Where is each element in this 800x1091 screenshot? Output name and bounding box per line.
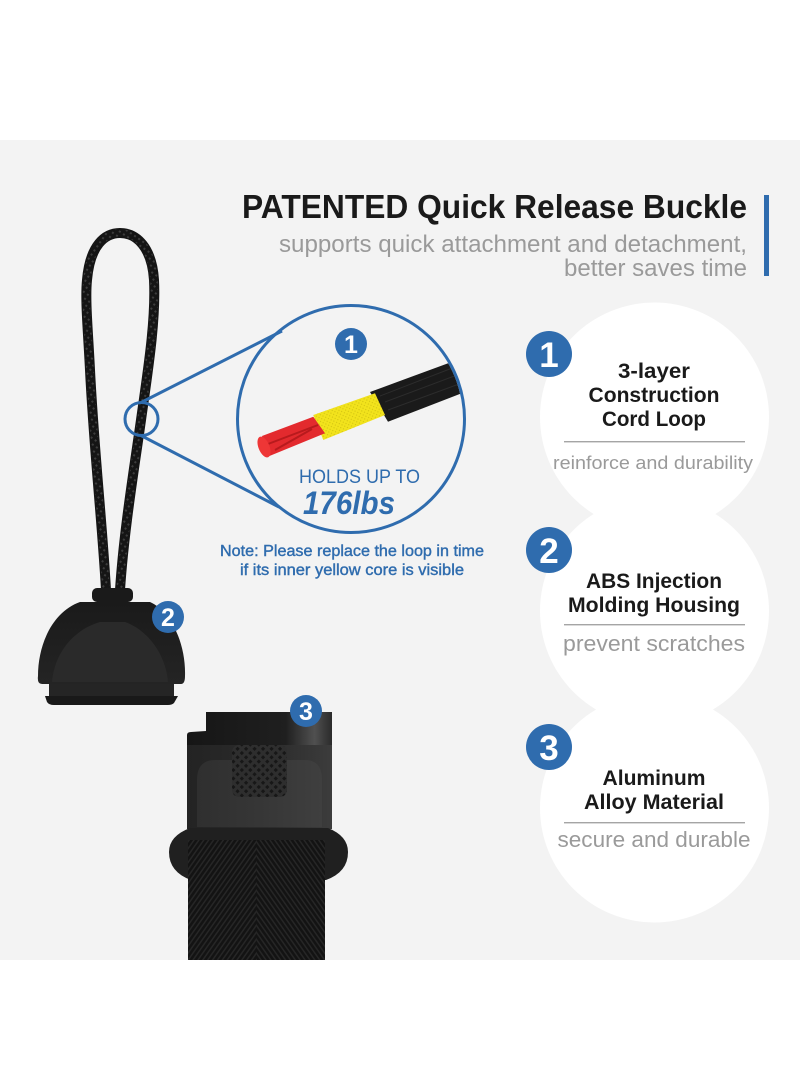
- feature 1 text: reinforce and durability: [553, 452, 754, 473]
- strap and ring: [169, 828, 348, 960]
- load value: 176lbs: [303, 485, 395, 521]
- subtitle: better saves time: [564, 255, 747, 282]
- badge 3: 3: [539, 729, 559, 768]
- badge 2: [526, 527, 572, 573]
- accent bar: [764, 195, 769, 276]
- note: [220, 543, 484, 579]
- feature 1 text: Cord Loop: [602, 408, 706, 431]
- badge on buckle: [290, 695, 322, 727]
- feature 1 text: 3-layer: [618, 360, 690, 383]
- cable cross-section: [257, 363, 460, 458]
- feature 1 background: [540, 302, 769, 532]
- small lens ring: [125, 402, 158, 436]
- buckle: [187, 712, 332, 829]
- feature 3 text: Alloy Material: [584, 791, 724, 814]
- badge on housing: 2: [161, 604, 175, 632]
- feature 2 text: prevent scratches: [563, 631, 745, 656]
- badge 1: 1: [539, 336, 559, 375]
- magnifier callout: [125, 306, 478, 532]
- feature 3 background: [540, 694, 769, 922]
- heading: [242, 188, 769, 282]
- subtitle: supports quick attachment and detachment,: [279, 231, 747, 258]
- feature 2 text: ABS Injection: [586, 570, 722, 593]
- lens badge: 1: [344, 331, 358, 359]
- zoom lines: [140, 331, 282, 507]
- panel: feature circles: [540, 302, 769, 922]
- cord loop: [86, 233, 154, 590]
- badge 2: 2: [539, 532, 559, 571]
- title: PATENTED Quick Release Buckle: [242, 188, 747, 225]
- holds up to label: HOLDS UP TO: [299, 467, 420, 488]
- feature 2 text: [563, 570, 745, 656]
- badge 3: [526, 724, 572, 770]
- badge on housing: [152, 601, 184, 633]
- feature 3 text: Aluminum: [602, 767, 706, 790]
- large lens ring: [238, 306, 464, 532]
- lens badge: [335, 328, 367, 360]
- housing: [38, 588, 185, 705]
- feature 3 text: [558, 767, 750, 852]
- subtitle: [279, 231, 747, 282]
- feature 1 text: [553, 360, 754, 473]
- badge on buckle: 3: [299, 698, 313, 726]
- background panel: [0, 140, 800, 960]
- note: Note: Please replace the loop in time: [220, 543, 484, 560]
- feature 1 text: Construction: [588, 384, 720, 407]
- feature 2 text: Molding Housing: [568, 594, 740, 617]
- badge 1: [526, 331, 572, 377]
- feature 2 background: [540, 496, 769, 726]
- note: if its inner yellow core is visible: [240, 562, 464, 579]
- feature 3 text: secure and durable: [558, 827, 750, 852]
